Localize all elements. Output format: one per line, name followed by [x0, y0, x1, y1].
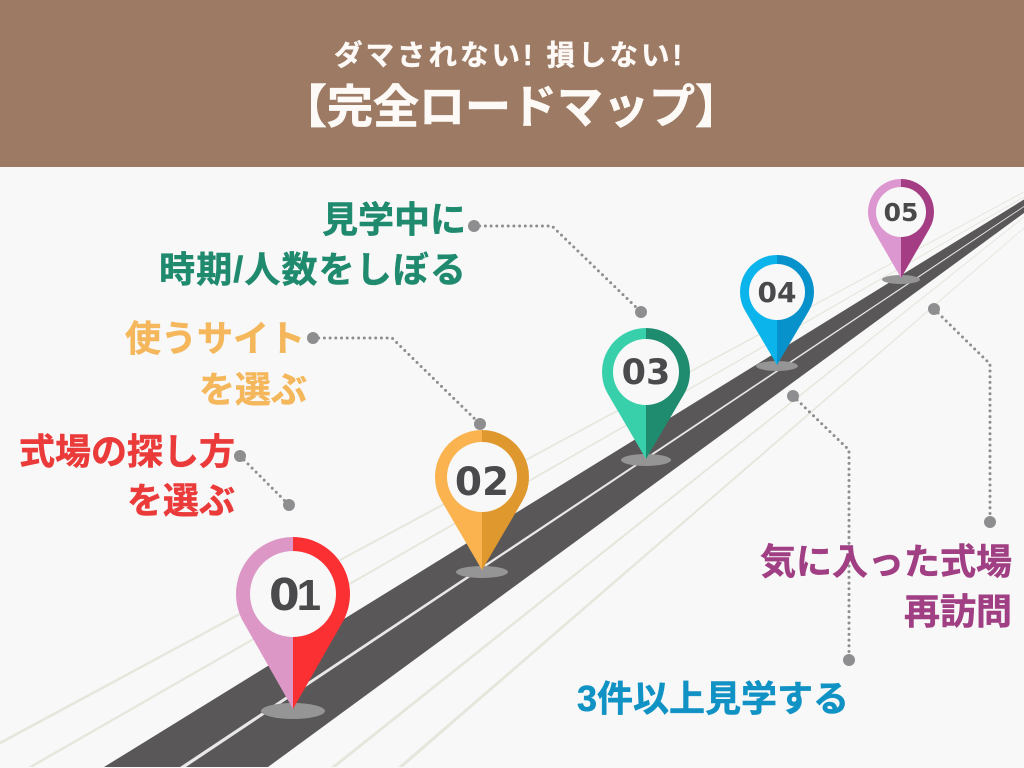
header banner — [0, 0, 1024, 167]
label: step 1 — [19, 431, 235, 521]
pin 01: 01 — [269, 570, 321, 621]
label: step 3: 時期/人数をしぼる — [159, 249, 467, 290]
subtitle: ダマされない! 損しない! — [334, 39, 682, 72]
leader line 2 — [307, 332, 486, 430]
label: step 5: 気に入った式場 — [760, 541, 1012, 582]
label: step 2 — [125, 318, 307, 410]
label: step 2: を選ぶ — [199, 369, 307, 410]
label: step 3: 見学中に — [322, 199, 466, 240]
label: step 1: 式場の探し方 — [19, 431, 235, 472]
title: 【完全ロードマップ】 — [281, 81, 741, 133]
pin 01 — [236, 537, 350, 719]
pin 04 — [740, 255, 814, 371]
label: step 1: を選ぶ — [127, 480, 235, 521]
leader line 1 — [234, 450, 295, 511]
leader line 4 — [787, 390, 855, 666]
pin 02: 02 — [455, 460, 509, 505]
pin 03: 03 — [622, 353, 670, 393]
pin 04: 04 — [758, 276, 796, 309]
pin 05: 05 — [884, 198, 918, 227]
label: step 5 — [760, 541, 1012, 632]
label: step 5: 再訪問 — [904, 591, 1012, 632]
pin 02 — [435, 430, 529, 578]
leader line 3 — [468, 220, 647, 318]
label: step 2: 使うサイト — [125, 318, 305, 359]
label: step 3 — [159, 199, 467, 290]
label: step 4: 3件以上見学する — [577, 678, 849, 719]
road with perspective lines — [0, 192, 1024, 767]
leader line 5 — [928, 303, 996, 528]
pin 05 — [868, 179, 934, 284]
pin 03 — [602, 328, 690, 466]
